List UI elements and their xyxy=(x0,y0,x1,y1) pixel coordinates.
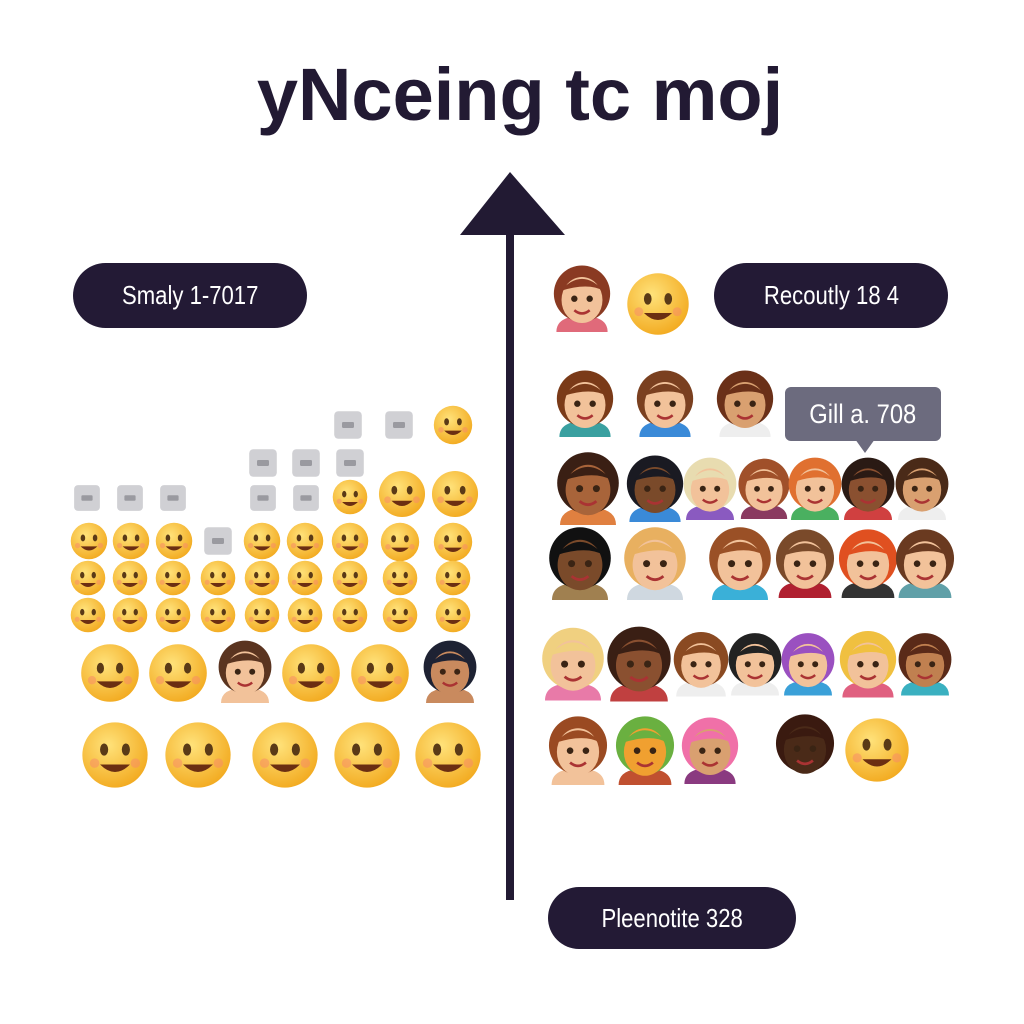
pill: bottom label xyxy=(548,887,796,949)
arrow xyxy=(460,172,565,900)
callout: Gill a. 708 xyxy=(809,398,916,428)
pill: left label xyxy=(73,263,307,328)
callout xyxy=(785,387,941,441)
pill: right label xyxy=(714,263,948,328)
pill: bottom label: Pleenotite 328 xyxy=(601,902,743,932)
pill: right label: Recoutly 18 4 xyxy=(763,280,899,310)
left emoji grid xyxy=(71,406,481,788)
right people grid xyxy=(542,265,954,785)
pill: left label: Smaly 1-7017 xyxy=(122,280,258,310)
title: yNceing tc moj xyxy=(257,53,783,136)
